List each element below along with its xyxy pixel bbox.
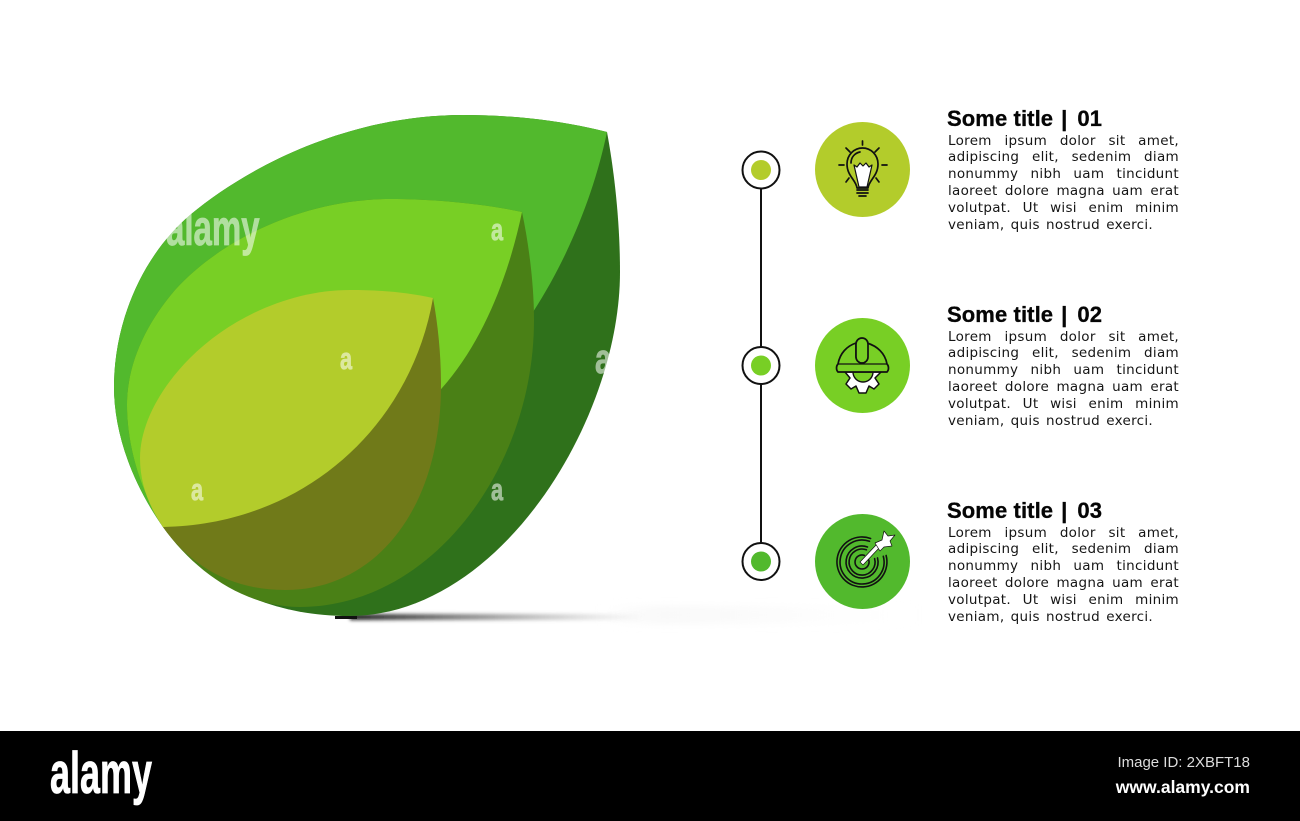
footer url: www.alamy.com — [1116, 777, 1250, 797]
icon: light bulb — [815, 122, 910, 217]
body 01: Lorem ipsum dolor sit amet, — [948, 132, 1179, 148]
body 03: adipiscing elit, sedenim diam — [948, 541, 1179, 557]
leaf layer: inner — [140, 290, 441, 590]
body 01: veniam, quis nostrud exerci. — [948, 217, 1153, 233]
footer bar — [0, 731, 1300, 821]
body 01: laoreet dolore magna uam erat — [948, 183, 1179, 199]
body 01: adipiscing elit, sedenim diam — [948, 149, 1179, 165]
body 03: Lorem ipsum dolor sit amet, — [948, 524, 1179, 540]
body 03: veniam, quis nostrud exerci. — [948, 609, 1153, 625]
body 03: volutpat. Ut wisi enim minim — [948, 592, 1179, 608]
body 02: adipiscing elit, sedenim diam — [948, 345, 1179, 361]
footer image id: Image ID: 2XBFT18 — [1117, 754, 1250, 771]
text block 01 — [947, 106, 1179, 233]
watermark: a mark 2: a — [340, 341, 352, 376]
body 02: laoreet dolore magna uam erat — [948, 379, 1179, 395]
watermark: a mark 1: a — [491, 212, 503, 247]
leaf layer: outer — [114, 115, 620, 616]
watermark: a mark 3: a — [595, 335, 611, 382]
ground shadow — [335, 606, 920, 624]
body 02: veniam, quis nostrud exerci. — [948, 413, 1153, 429]
watermark: a mark 5: a — [491, 472, 503, 507]
body 02: volutpat. Ut wisi enim minim — [948, 396, 1179, 412]
text block 02 — [947, 302, 1179, 429]
body 03: nonummy nibh uam tincidunt — [948, 558, 1179, 574]
icon: helmet and gear — [815, 318, 910, 413]
body 03: laoreet dolore magna uam erat — [948, 575, 1179, 591]
text block 03 — [947, 498, 1179, 625]
icon: target and arrow — [815, 514, 910, 609]
heading 03: Some title | 03 — [947, 498, 1102, 523]
watermark: alamy on leaf: alamy — [166, 200, 260, 256]
heading 02: Some title | 02 — [947, 302, 1102, 327]
heading 01: Some title | 01 — [947, 106, 1102, 131]
body 01 — [948, 132, 1179, 233]
body 01: nonummy nibh uam tincidunt — [948, 166, 1179, 182]
timeline node 2 — [742, 347, 780, 384]
body 02 — [948, 328, 1179, 429]
timeline — [742, 152, 780, 580]
timeline node 1 — [742, 152, 780, 188]
leaf layer: middle — [127, 199, 534, 607]
body 03 — [948, 524, 1179, 625]
body 01: volutpat. Ut wisi enim minim — [948, 200, 1179, 216]
timeline node 3 — [742, 543, 780, 580]
footer logo: alamy — [50, 741, 152, 806]
body 02: Lorem ipsum dolor sit amet, — [948, 328, 1179, 344]
watermark: a mark 4: a — [191, 472, 203, 507]
body 02: nonummy nibh uam tincidunt — [948, 362, 1179, 378]
